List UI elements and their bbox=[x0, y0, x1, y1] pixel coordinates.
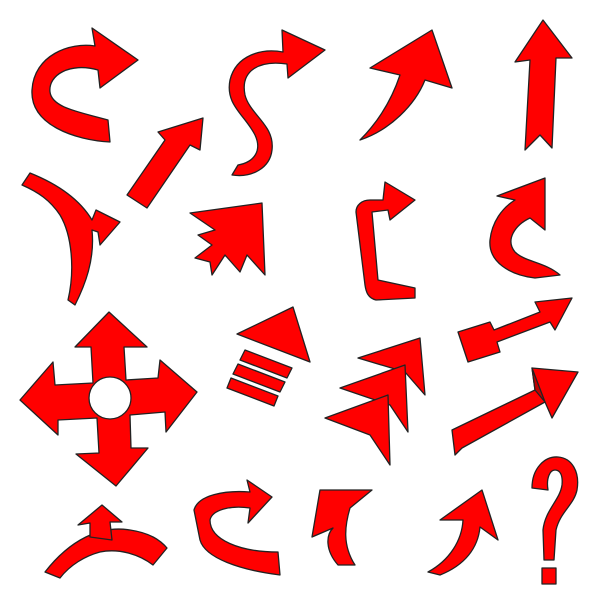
arrow: up on arch bbox=[45, 505, 167, 578]
arrow: chevrons bbox=[325, 338, 425, 465]
arrow: 3D curved bbox=[312, 490, 372, 565]
arrow: up-right small bbox=[190, 203, 265, 275]
arrow: curly right bbox=[490, 178, 560, 278]
arrow: vertical up bbox=[515, 20, 572, 150]
arrow: up-right curved bbox=[428, 490, 498, 575]
arrow: branch bbox=[22, 173, 120, 305]
arrow: four-way bbox=[20, 312, 197, 486]
arrow: short diagonal bbox=[127, 118, 203, 208]
arrow: curly top-left bbox=[32, 28, 138, 142]
arrow: rect to right bbox=[458, 298, 572, 362]
arrow: big diagonal bbox=[360, 30, 452, 140]
arrow: bracket bbox=[356, 182, 415, 300]
arrow: striped up bbox=[227, 307, 310, 406]
center circle bbox=[89, 377, 131, 419]
arrow: S curve bbox=[229, 30, 325, 176]
question mark bbox=[532, 457, 578, 584]
arrow: 3D right bbox=[452, 368, 578, 455]
arrow: curl 3D bbox=[194, 480, 280, 575]
